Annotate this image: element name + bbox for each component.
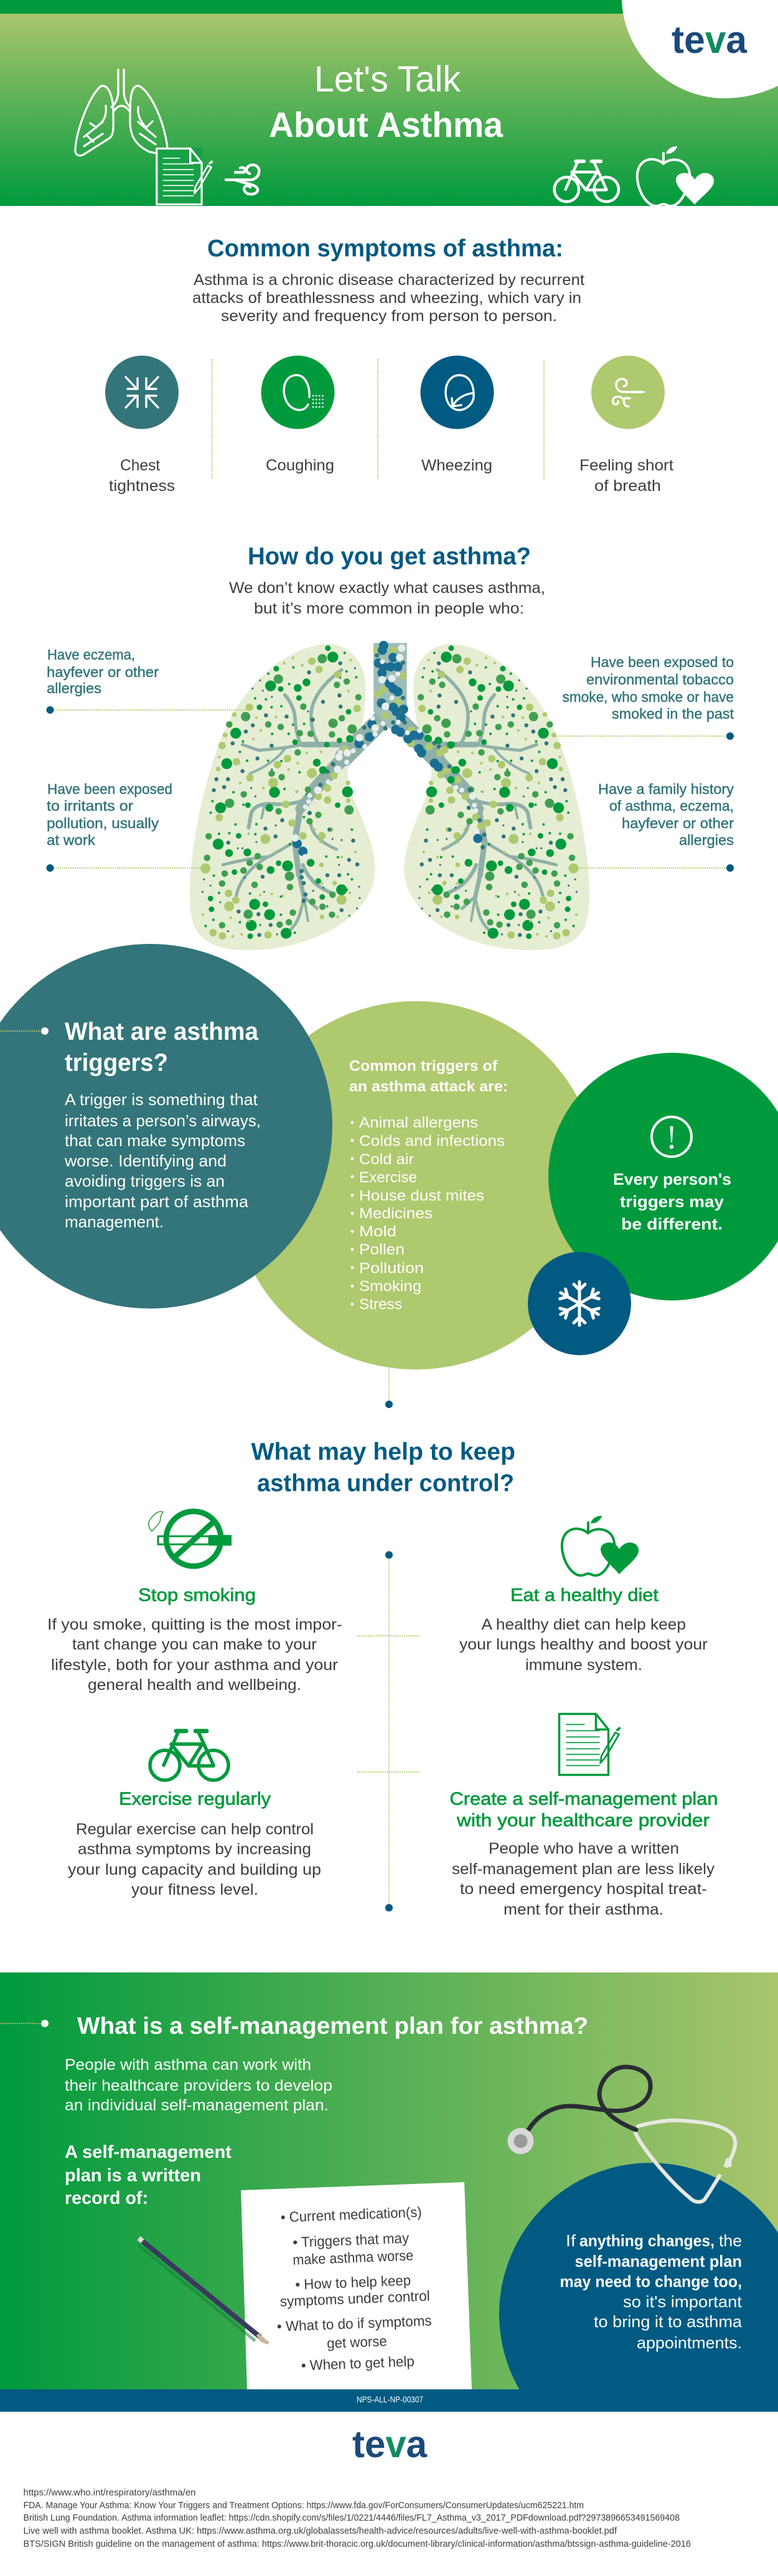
tip: stop smoking: tant change you can make to your: [72, 1636, 317, 1653]
callout: tobacco smoke: Have been exposed to: [591, 654, 734, 670]
triggers list: Smoking: [359, 1278, 421, 1295]
tip: stop smoking: lifestyle, both for your asthma and your: [51, 1656, 338, 1674]
triggers list: Colds and infections: [359, 1132, 505, 1150]
intro text: We don’t know exactly what causes asthma,: [229, 579, 545, 597]
references: BTS/SIGN British guideline on the management of asthma: https://www.brit-thoracic.org.uk/document-library/clinical-information/asthma/btssign-asthma-guideline-2016: [24, 2539, 691, 2549]
blue circle background: [499, 2163, 778, 2389]
callout text: [613, 1170, 731, 1233]
logo: teva top right: teva: [672, 19, 748, 62]
triggers body text: that can make symptoms: [65, 1131, 245, 1150]
symptom labels: Feeling short: [579, 457, 673, 474]
callout: plan may change: [560, 2231, 743, 2352]
tip: exercise regularly: your fitness level.: [131, 1881, 258, 1898]
symptom labels: of breath: [594, 477, 661, 495]
callout text: be different.: [621, 1215, 723, 1233]
triggers body text: [64, 1090, 261, 1231]
tip: exercise regularly: [68, 1731, 321, 1898]
references: British Lung Foundation. Asthma information leaflet: https://cdn.shopify.com/s/files/1/0221/4446/files/FL7_Asthma_v3_2017_PDFdownload.pdf?2973896653491569408: [24, 2513, 680, 2523]
callout: eczema and allergies: Have eczema,: [47, 646, 135, 663]
title: [269, 59, 504, 145]
references: FDA. Manage Your Asthma: Know Your Triggers and Treatment Options: https://www.fda.gov/ForConsumers/ConsumerUpdates/ucm625221.htm: [24, 2500, 584, 2511]
icon: exclamation: [652, 1117, 691, 1157]
callout: family history: [598, 781, 734, 872]
subheading: written record: A self-management: [65, 2142, 232, 2162]
callout: plan may change: the: [719, 2231, 742, 2250]
icon: bicycle: [555, 161, 619, 202]
tip: self-management plan: self-management plan are less likely: [452, 1860, 715, 1878]
callout: tobacco smoke: smoke, who smoke or have: [563, 689, 734, 705]
callout: eczema and allergies: [46, 646, 159, 714]
callout: plan may change: so it's important: [623, 2292, 743, 2311]
tip: self-management plan: ment for their asthma.: [504, 1901, 663, 1918]
callout: family history: allergies: [679, 832, 734, 848]
references: https://www.who.int/respiratory/asthma/en: [24, 2488, 195, 2498]
icon: wheezing: [421, 356, 494, 429]
icon: wind: [226, 165, 259, 194]
callout: family history: Have a family history: [598, 781, 734, 797]
triggers list: Stress: [359, 1296, 402, 1313]
triggers body text: worse. Identifying and: [64, 1151, 227, 1170]
callout: plan may change: appointments.: [637, 2333, 742, 2352]
common triggers heading: an asthma attack are:: [349, 1078, 508, 1095]
tip: healthy diet: [459, 1516, 708, 1674]
subheading: written record: record of:: [65, 2188, 148, 2208]
callout text: triggers may: [620, 1192, 724, 1211]
subheading: written record: [65, 2142, 232, 2208]
triggers list: House dust mites: [359, 1187, 484, 1205]
symptoms intro text: severity and frequency from person to person.: [221, 307, 557, 325]
icon: coughing: [261, 356, 335, 429]
symptom labels: tightness: [109, 477, 175, 495]
icon: pencil: [138, 2238, 268, 2343]
callout: plan may change: may need to change too,: [560, 2272, 742, 2291]
panel: header banner: [0, 0, 778, 206]
tip: healthy diet: A healthy diet can help keep: [482, 1616, 686, 1633]
intro text: their healthcare providers to develop: [65, 2077, 332, 2094]
icon: chest tightness: [105, 356, 179, 429]
paper with checklist: • How to help keep: [295, 2272, 411, 2293]
callout: tobacco smoke: environmental tobacco: [586, 671, 734, 688]
paper with checklist: make asthma worse: [293, 2247, 414, 2268]
tip: self-management plan: [449, 1714, 718, 1918]
icon: no smoking: [149, 1511, 232, 1566]
callout: irritants or pollution: at work: [47, 832, 96, 848]
triggers list: Mold: [359, 1223, 396, 1240]
subheading: written record: plan is a written: [65, 2165, 201, 2185]
callout: plan may change: anything changes,: [579, 2231, 715, 2250]
paper with checklist: get worse: [327, 2333, 387, 2351]
tip: stop smoking: Stop smoking: [138, 1585, 256, 1605]
section: what may help: [47, 1439, 718, 1918]
triggers list: [351, 1114, 505, 1313]
icon: short of breath: [591, 356, 665, 429]
callout: irritants or pollution: to irritants or: [47, 798, 133, 814]
panel: common triggers circle: [232, 1001, 600, 1370]
heading: what may help: What may help to keep: [251, 1439, 515, 1465]
intro text: but it’s more common in people who:: [254, 600, 524, 617]
intro text: People with asthma can work with: [65, 2056, 311, 2073]
paper with checklist: symptoms under control: [279, 2287, 430, 2310]
tip: stop smoking: If you smoke, quitting is the most impor-: [47, 1616, 342, 1633]
section: common symptoms: [105, 235, 673, 495]
panel: self-management plan: [0, 1972, 778, 2389]
triggers list: Cold air: [359, 1151, 414, 1168]
callout: eczema and allergies: hayfever or other: [47, 664, 159, 680]
section: asthma triggers: [0, 944, 778, 1408]
callout: plan may change: self-management plan: [575, 2252, 742, 2270]
symptom labels: Chest: [120, 457, 160, 474]
symptoms intro text: attacks of breathlessness and wheezing, which vary in: [192, 289, 581, 307]
callout: family history: hayfever or other: [622, 815, 734, 831]
callout text: Every person's: [613, 1170, 731, 1188]
icon: document with pen: [156, 147, 212, 205]
common triggers heading: Common triggers of: [349, 1058, 498, 1075]
icon: stethoscope: [508, 2067, 735, 2202]
tip: self-management plan: to need emergency hospital treat-: [460, 1880, 707, 1898]
heading: how do you get asthma: How do you get asthma?: [248, 543, 531, 570]
header top bar: [0, 0, 778, 14]
triggers body text: important part of asthma: [65, 1192, 249, 1211]
triggers heading: triggers?: [65, 1049, 168, 1076]
triggers heading: What are asthma: [65, 1018, 259, 1045]
tip: self-management plan: People who have a written: [489, 1840, 679, 1857]
footer code bar: NPS-ALL-NP-00307: [357, 2394, 423, 2404]
white logo blob: [622, 0, 778, 98]
title: About Asthma: [269, 105, 504, 145]
triggers body text: A trigger is something that: [65, 1090, 258, 1109]
tip: exercise regularly: your lung capacity and building up: [68, 1861, 321, 1878]
lungs illustration: [190, 643, 589, 950]
triggers body text: irritates a person’s airways,: [65, 1111, 261, 1130]
triggers list: Medicines: [359, 1205, 433, 1222]
icon: snowflake circle: [528, 1252, 631, 1355]
tip: healthy diet: Eat a healthy diet: [510, 1585, 658, 1605]
triggers body text: management.: [65, 1212, 164, 1231]
common triggers heading: [349, 1058, 508, 1095]
callout: eczema and allergies: allergies: [47, 680, 101, 696]
triggers list: Exercise: [359, 1169, 417, 1186]
title: Let's Talk: [314, 59, 461, 100]
callout: irritants or pollution: Have been exposed: [47, 781, 172, 797]
paper with checklist: • What to do if symptoms: [276, 2312, 432, 2335]
tip: healthy diet: immune system.: [525, 1656, 642, 1674]
callout: tobacco smoke: smoked in the past: [612, 706, 734, 722]
tip: exercise regularly: Exercise regularly: [119, 1790, 271, 1809]
icon: apple and heart: [562, 1516, 639, 1575]
paper with checklist: • Current medication(s): [280, 2204, 422, 2225]
triggers list: Pollen: [359, 1241, 405, 1258]
tip: stop smoking: general health and wellbeing.: [88, 1676, 301, 1694]
tip: self-management plan: with your healthcare provider: [456, 1811, 710, 1831]
paper with checklist: [241, 2182, 472, 2389]
paper with checklist: • Triggers that may: [293, 2229, 410, 2251]
callout: tobacco smoke: [563, 654, 734, 740]
tip: exercise regularly: Regular exercise can help control: [76, 1821, 314, 1838]
tip: self-management plan: Create a self-management plan: [449, 1790, 718, 1809]
symptoms intro text: Asthma is a chronic disease characterized by recurrent: [194, 271, 584, 289]
panel: every person's triggers circle: [548, 1053, 778, 1300]
header gradient background: [0, 14, 778, 206]
heading: what may help: [251, 1439, 515, 1497]
symptoms intro text: [192, 271, 584, 325]
intro text: [229, 579, 545, 617]
triggers heading: [65, 1018, 259, 1076]
callout: plan may change: to bring it to asthma: [594, 2312, 743, 2331]
triggers list: Animal allergens: [359, 1114, 478, 1131]
paper with checklist: • When to get help: [301, 2353, 415, 2373]
callout: family history: of asthma, eczema,: [609, 798, 734, 814]
intro text: an individual self-management plan.: [65, 2097, 329, 2114]
section: how do you get asthma: [46, 543, 734, 950]
references: Live well with asthma booklet. Asthma UK: https://www.asthma.org.uk/globalassets/health-advice/resources/adults/live-well-with-asthma-booklet.pdf: [24, 2526, 617, 2536]
callout: irritants or pollution: [46, 781, 172, 872]
icon: apple and heart: [637, 146, 714, 206]
heading: self-management plan: What is a self-management plan for asthma?: [77, 2014, 588, 2040]
tip: healthy diet: your lungs healthy and boost your: [459, 1636, 708, 1653]
references: [24, 2488, 691, 2549]
triggers list: Pollution: [359, 1260, 424, 1277]
symptom labels: [109, 457, 673, 495]
footer code bar: [0, 2389, 778, 2412]
callout: plan may change: If: [566, 2231, 576, 2250]
icon: document with pen: [559, 1714, 620, 1775]
icon: bicycle: [150, 1731, 228, 1780]
triggers body text: avoiding triggers is an: [65, 1172, 225, 1190]
intro text: [65, 2056, 332, 2114]
heading: common symptoms: Common symptoms of asthma:: [207, 235, 563, 262]
tip: stop smoking: [47, 1511, 342, 1694]
panel: what are asthma triggers circle: [0, 944, 332, 1309]
icon: lungs outline: [75, 70, 168, 156]
symptom labels: Coughing: [266, 457, 334, 474]
callout: irritants or pollution: pollution, usually: [47, 815, 159, 831]
symptom labels: Wheezing: [421, 457, 492, 474]
logo: teva footer: teva: [352, 2423, 428, 2465]
tip: exercise regularly: asthma symptoms by increasing: [78, 1841, 311, 1858]
heading: what may help: asthma under control?: [257, 1470, 514, 1497]
